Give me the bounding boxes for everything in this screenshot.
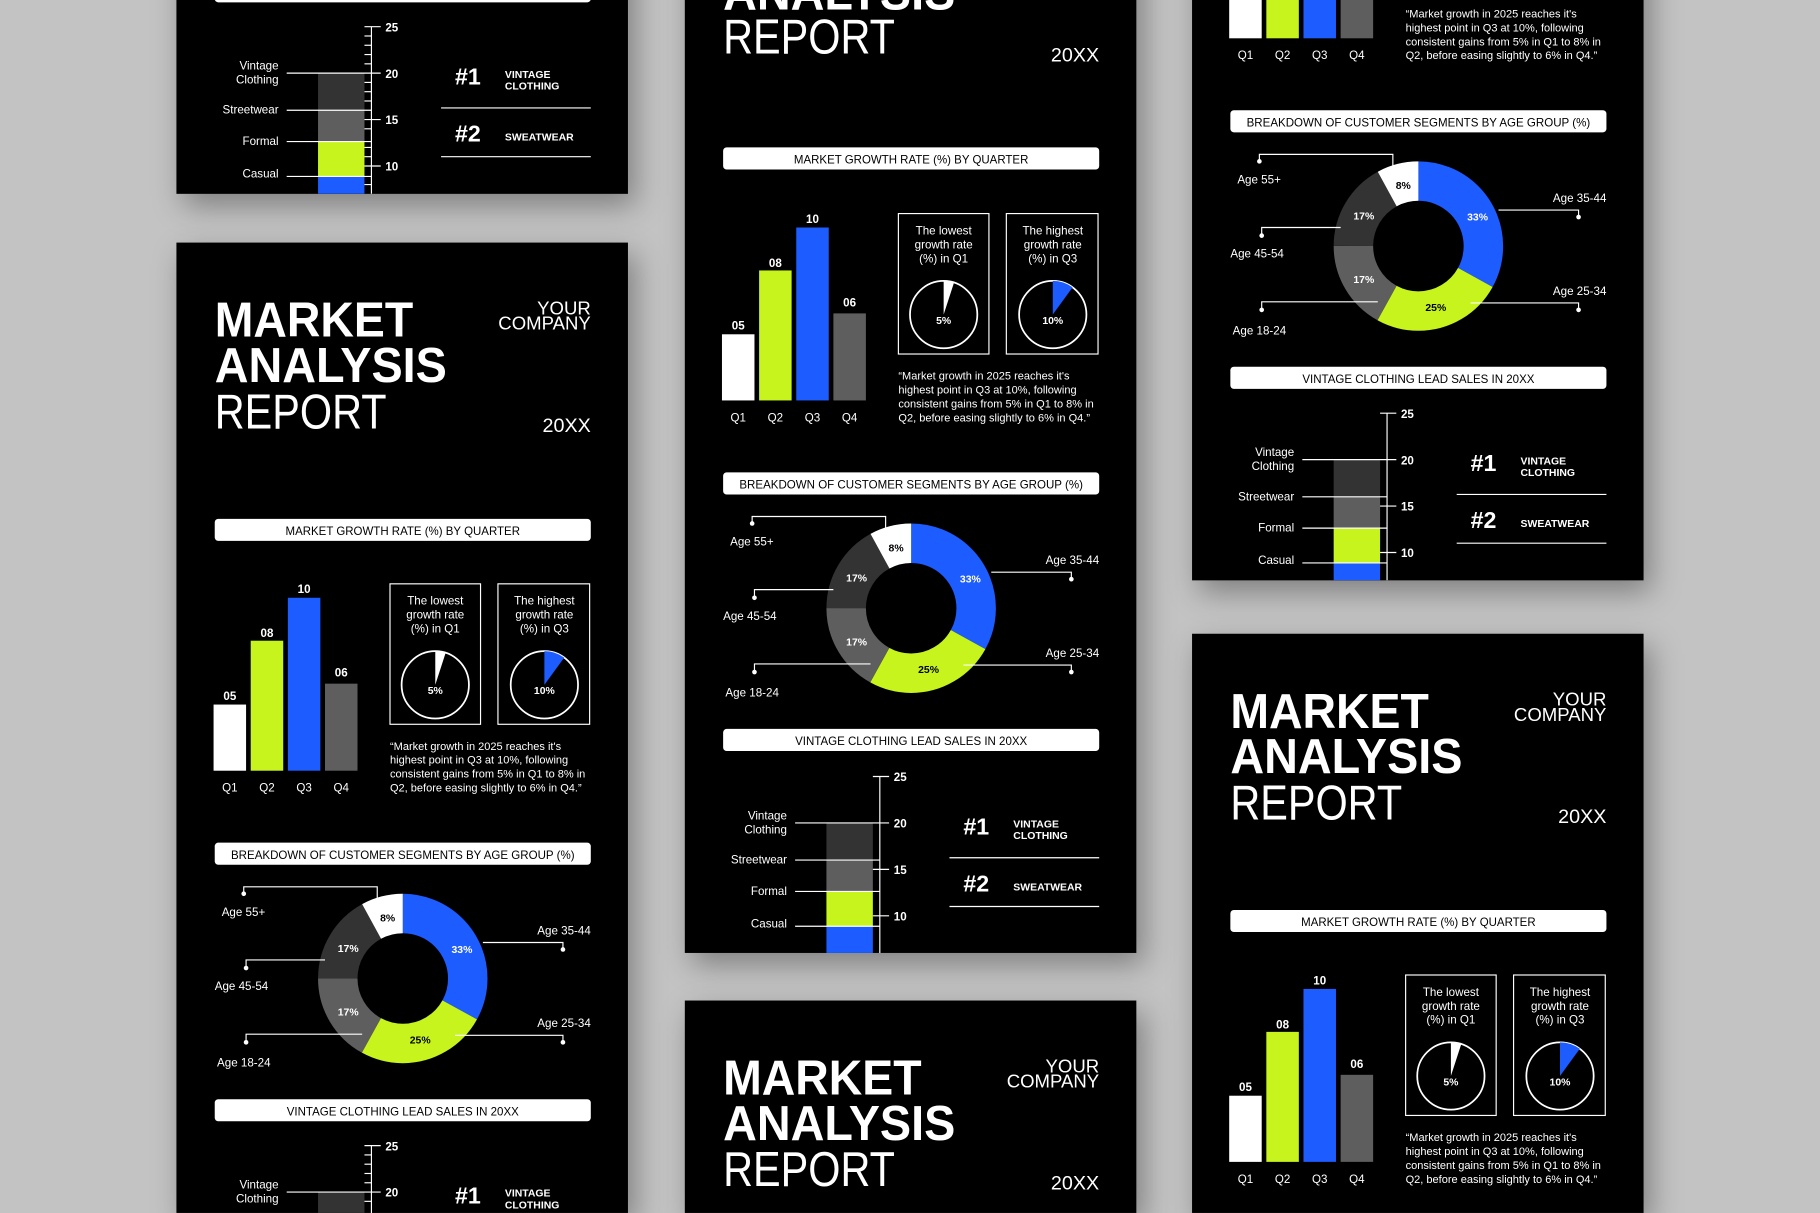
section: market growth: Q1	[222, 782, 238, 795]
section: donut: 8%	[889, 543, 904, 554]
section: market growth: growth rate	[515, 609, 573, 622]
section: vintage sales: SWEATWEAR	[1521, 519, 1590, 530]
section: vintage sales: VINTAGE	[1521, 456, 1566, 467]
section: donut: Age 18-24	[1233, 324, 1287, 337]
section: vintage sales: CLOTHING	[505, 1200, 559, 1211]
section: donut: Age 35-44	[537, 924, 591, 937]
section: donut: BREAKDOWN OF CUSTOMER SEGMENTS BY AGE GROUP (%)	[1247, 117, 1590, 130]
section: vintage sales: Vintage	[239, 1179, 279, 1192]
section: market growth: growth rate	[1531, 1000, 1589, 1013]
section: donut: Age 25-34	[1553, 285, 1607, 298]
section: vintage sales: 20	[385, 1187, 398, 1200]
section: market growth: (%) in Q1	[919, 252, 968, 265]
section: market growth: (%) in Q1	[1426, 1014, 1475, 1027]
section: market growth: Q2, before easing slightly to 6% in Q4.”	[1406, 1174, 1598, 1186]
title: 20XX	[1051, 1173, 1099, 1195]
section: vintage sales: CLOTHING	[505, 81, 559, 92]
section: vintage sales: CLOTHING	[1521, 468, 1575, 479]
section: market growth: 10	[1313, 974, 1326, 987]
section: market growth: 10%	[534, 686, 555, 697]
section: market growth: Q4	[334, 782, 350, 795]
section: market growth: 08	[1276, 1018, 1290, 1031]
section: market growth: The highest	[1022, 224, 1084, 237]
section: market growth: MARKET GROWTH RATE (%) BY QUARTER	[286, 525, 520, 538]
section: market growth (bottom part): Q2	[1275, 49, 1290, 62]
section: market growth: Q3	[805, 411, 820, 424]
section: market growth: 06	[1350, 1058, 1364, 1071]
section: vintage sales: 25	[385, 1140, 399, 1153]
section: vintage sales: Vintage	[748, 809, 787, 822]
section: vintage sales: Casual	[242, 168, 279, 181]
card D: poster middle bottom (title only visible)	[685, 1001, 1136, 1213]
section: vintage sales: 20	[1401, 454, 1414, 467]
card B: full poster left	[176, 243, 628, 1213]
section: donut: Age 18-24	[217, 1057, 271, 1070]
section: vintage sales	[215, 1099, 591, 1213]
section: donut: Age 35-44	[1046, 554, 1100, 567]
section: vintage sales: #2	[455, 121, 481, 147]
section: market growth: 10%	[1042, 316, 1063, 327]
section: market growth: 05	[732, 320, 745, 333]
section: vintage sales: 25	[385, 21, 399, 34]
title	[215, 294, 591, 439]
section: market growth: growth rate	[915, 238, 973, 251]
section: donut: 8%	[380, 914, 395, 925]
section: market growth: The highest	[514, 595, 575, 608]
section: market growth: Q4	[1349, 1173, 1365, 1186]
section: donut: BREAKDOWN OF CUSTOMER SEGMENTS BY AGE GROUP (%)	[231, 849, 575, 862]
section: vintage sales: Formal	[751, 885, 787, 898]
section: market growth (bottom part): Q4	[1349, 49, 1365, 62]
section: market growth (bottom part): consistent gains from 5% in Q1 to 8% in	[1406, 36, 1601, 48]
section: market growth (bottom part): Q3	[1312, 49, 1327, 62]
section: market growth: 05	[1239, 1081, 1252, 1094]
section: vintage sales: VINTAGE	[1013, 820, 1059, 831]
section: donut: Age 25-34	[1046, 647, 1100, 660]
section: market growth: 08	[769, 257, 782, 270]
section: vintage sales: #1	[1471, 450, 1497, 476]
section: vintage sales: 25	[894, 771, 907, 784]
section: market growth: MARKET GROWTH RATE (%) BY QUARTER	[1301, 916, 1536, 929]
title: ANALYSIS	[215, 339, 447, 393]
section: donut: 17%	[846, 637, 867, 648]
section: vintage sales: 25	[1401, 408, 1414, 421]
section: vintage sales: SWEATWEAR	[1013, 882, 1083, 893]
card C: poster middle	[685, 0, 1136, 953]
section: vintage sales: VINTAGE CLOTHING LEAD SALES IN 20XX	[795, 735, 1027, 748]
section: market growth: Q1	[730, 411, 746, 424]
section: market growth	[1229, 910, 1606, 1186]
section: market growth: (%) in Q1	[411, 623, 460, 636]
section: market growth: Q4	[842, 411, 858, 424]
section: vintage sales: #2	[1471, 507, 1496, 533]
section: market growth: growth rate	[1422, 1000, 1480, 1013]
section: donut: Age 45-54	[215, 980, 269, 993]
section: donut	[215, 843, 591, 1070]
section: donut: 33%	[452, 945, 472, 956]
section: market growth: consistent gains from 5% in Q1 to 8% in	[898, 398, 1094, 410]
section: market growth: The lowest	[407, 595, 464, 608]
section: vintage sales: Clothing	[1252, 460, 1294, 473]
section: vintage sales: VINTAGE	[505, 70, 551, 81]
section: market growth: Q1	[1238, 1173, 1253, 1186]
section: market growth: (%) in Q3	[520, 623, 569, 636]
section: vintage sales: 15	[894, 864, 907, 877]
section: market growth: 10	[298, 583, 311, 596]
section: market growth: consistent gains from 5% in Q1 to 8% in	[390, 769, 585, 781]
section: market growth: 06	[843, 296, 857, 309]
section: vintage sales: #1	[455, 1183, 481, 1209]
section: vintage sales: Casual	[1258, 554, 1294, 567]
title: MARKET	[1230, 685, 1429, 739]
section: market growth: The highest	[1530, 986, 1591, 999]
section: market growth: growth rate	[1024, 238, 1082, 251]
section: market growth (bottom part): highest point in Q3 at 10%, following	[1406, 22, 1584, 34]
section: donut: Age 45-54	[1230, 248, 1284, 261]
title: ANALYSIS	[723, 1097, 955, 1151]
section: donut: Age 55+	[1237, 173, 1281, 186]
section: market growth: 10%	[1550, 1077, 1570, 1088]
card E: poster right top (donut + sales)	[1192, 0, 1644, 580]
section: donut: 17%	[1353, 275, 1374, 286]
title	[723, 0, 1099, 67]
section: market growth: 5%	[428, 686, 443, 697]
section: vintage sales: Casual	[751, 917, 787, 930]
section: vintage sales: CLOTHING	[1013, 831, 1068, 842]
section: vintage sales: Streetwear	[1238, 490, 1294, 503]
section: market growth: Q2	[259, 782, 275, 795]
section: market growth: 5%	[1443, 1077, 1458, 1088]
section: market growth: 05	[223, 690, 237, 703]
title: REPORT	[215, 385, 387, 439]
section: vintage sales: VINTAGE CLOTHING LEAD SALES IN 20XX	[1302, 373, 1535, 386]
section: market growth: highest point in Q3 at 10%, following	[1406, 1146, 1584, 1158]
section: donut: Age 55+	[222, 906, 265, 919]
section: market growth: “Market growth in 2025 reaches it's	[390, 741, 562, 753]
section: market growth	[214, 519, 591, 795]
card F: poster right bottom	[1192, 634, 1644, 1213]
section: donut: 17%	[846, 574, 867, 585]
section: market growth: “Market growth in 2025 reaches it's	[1406, 1132, 1577, 1144]
title: COMPANY	[498, 313, 591, 334]
section: donut: 25%	[410, 1035, 431, 1046]
section: vintage sales: Clothing	[744, 823, 787, 836]
section: market growth: “Market growth in 2025 reaches it's	[898, 371, 1070, 383]
section: donut: Age 45-54	[723, 610, 777, 623]
section: donut: 33%	[960, 575, 981, 586]
section: market growth: 5%	[936, 316, 951, 327]
section: market growth: 08	[261, 627, 274, 640]
section: market growth: highest point in Q3 at 10%, following	[390, 755, 568, 767]
section: market growth: Q2, before easing slightly to 6% in Q4.”	[390, 783, 582, 795]
section: vintage sales: #2	[963, 870, 989, 896]
section: market growth	[722, 147, 1099, 424]
section: market growth (bottom part): Q1	[1238, 49, 1253, 62]
section: market growth: Q2	[1275, 1173, 1290, 1186]
section: market growth (bottom part): Q2, before easing slightly to 6% in Q4.”	[1406, 50, 1598, 62]
section: vintage sales: VINTAGE CLOTHING LEAD SALES IN 20XX	[287, 1105, 519, 1118]
section: market growth: Q3	[1312, 1173, 1327, 1186]
card A: partial poster top-left	[176, 0, 628, 194]
section: market growth: Q2	[768, 411, 783, 424]
section: donut: Age 25-34	[537, 1017, 591, 1030]
section: vintage sales: 20	[894, 818, 907, 831]
section: donut: 33%	[1467, 213, 1488, 224]
section: market growth: 06	[335, 667, 348, 680]
title: REPORT	[723, 1143, 895, 1197]
title: REPORT	[723, 10, 895, 64]
title: COMPANY	[1514, 704, 1606, 725]
section: vintage sales: Vintage	[1255, 446, 1294, 459]
section: market growth: (%) in Q3	[1028, 252, 1077, 265]
section: vintage sales: Formal	[242, 135, 279, 148]
title: MARKET	[723, 1052, 922, 1106]
section: donut: BREAKDOWN OF CUSTOMER SEGMENTS BY AGE GROUP (%)	[739, 479, 1083, 492]
section: donut: 25%	[918, 665, 939, 676]
title: 20XX	[1051, 45, 1099, 67]
section: donut	[723, 472, 1100, 699]
section: vintage sales: 20	[385, 68, 398, 81]
section: vintage sales: #1	[963, 814, 989, 840]
section: market growth: highest point in Q3 at 10%, following	[898, 384, 1077, 396]
section: vintage sales: Streetwear	[731, 854, 787, 867]
section: vintage sales	[1230, 367, 1606, 580]
section: vintage sales: 10	[385, 161, 398, 174]
section: market growth: 10	[806, 213, 819, 226]
title: MARKET	[215, 294, 413, 348]
section: vintage sales	[723, 729, 1099, 953]
section: vintage sales: Formal	[1258, 522, 1294, 535]
title: REPORT	[1230, 776, 1402, 830]
title: 20XX	[543, 415, 591, 437]
section: donut: Age 55+	[730, 536, 774, 549]
title: YOUR	[1046, 1055, 1099, 1076]
section: vintage sales	[215, 0, 591, 194]
title: 20XX	[1558, 806, 1606, 828]
section: market growth: (%) in Q3	[1536, 1014, 1584, 1027]
section: market growth: consistent gains from 5% in Q1 to 8% in	[1406, 1160, 1601, 1172]
section: market growth: Q2, before easing slightly to 6% in Q4.”	[898, 412, 1090, 424]
section: vintage sales: Clothing	[236, 1192, 279, 1205]
section: vintage sales: 10	[894, 910, 907, 923]
section: market growth: growth rate	[406, 609, 464, 622]
section: vintage sales: 15	[1401, 501, 1414, 514]
section: donut: Age 18-24	[725, 686, 780, 699]
section: donut: Age 35-44	[1553, 192, 1607, 205]
section: vintage sales: Vintage	[239, 60, 279, 73]
section: vintage sales: 15	[385, 114, 399, 127]
section: vintage sales: VINTAGE	[505, 1189, 551, 1200]
title	[1230, 685, 1606, 830]
title: ANALYSIS	[1230, 730, 1462, 784]
section: donut: 17%	[338, 944, 359, 955]
section: market growth: The lowest	[1423, 986, 1480, 999]
section: market growth: MARKET GROWTH RATE (%) BY QUARTER	[794, 154, 1028, 167]
section: vintage sales: #1	[455, 64, 481, 90]
section: donut: 8%	[1396, 181, 1411, 192]
title: YOUR	[537, 298, 591, 319]
section: vintage sales: Streetwear	[223, 104, 279, 117]
section: donut: 25%	[1425, 303, 1446, 314]
section: donut: 17%	[1353, 211, 1374, 222]
section: vintage sales: SWEATWEAR	[505, 132, 574, 143]
section: market growth (bottom part)	[1229, 0, 1601, 62]
title: COMPANY	[1007, 1071, 1099, 1092]
title: YOUR	[1553, 689, 1606, 710]
section: vintage sales: 10	[1401, 547, 1414, 560]
section: donut	[1230, 110, 1607, 337]
section: market growth: The lowest	[916, 224, 972, 237]
section: market growth: Q3	[296, 782, 312, 795]
section: vintage sales: Clothing	[236, 74, 279, 87]
section: donut: 17%	[338, 1008, 359, 1019]
section: market growth (bottom part): “Market growth in 2025 reaches it's	[1406, 8, 1577, 20]
title	[723, 1052, 1099, 1197]
